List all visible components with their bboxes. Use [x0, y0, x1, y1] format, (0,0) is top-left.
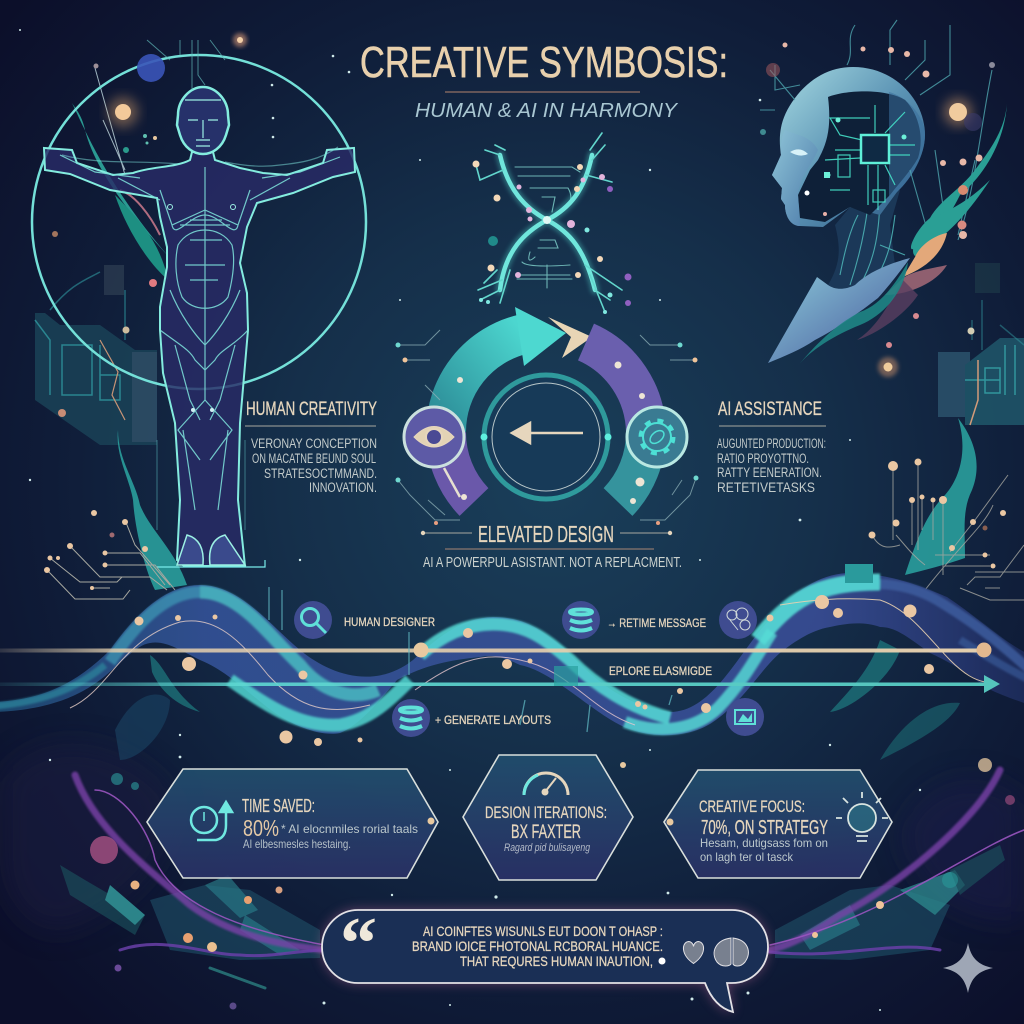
panel: design iterations: Ragard pid bulisayeng — [504, 842, 591, 854]
label: ai assistance: RETETIVETASKS — [717, 480, 815, 495]
face details — [185, 100, 221, 146]
icon: light bulb — [836, 792, 888, 841]
panel: time saved: TIME SAVED: — [242, 796, 315, 816]
chip — [861, 135, 889, 163]
circuit stems — [269, 587, 672, 732]
panel: design iterations — [463, 755, 633, 880]
circuit branches around diagram — [398, 330, 696, 520]
title: CREATIVE SYMBOSIS: — [360, 38, 728, 87]
callout: quote bubble: THAT REQURES HUMAN INAUTION, — [460, 954, 653, 969]
AI head profile — [768, 67, 925, 363]
step: explore: EPLORE ELASMIGDE — [609, 664, 712, 678]
thin wave lines — [70, 599, 985, 725]
panel: design iterations: DESION ITERATIONS: — [485, 803, 607, 822]
shoulders — [768, 258, 910, 363]
panel: time saved: * AI elocnmiles rorial taals — [281, 822, 418, 836]
teal arrow head — [515, 307, 566, 366]
icon: clock with arrow — [191, 802, 232, 840]
step: retime message: → RETIME MESSAGE — [607, 616, 706, 630]
hourglass lines — [515, 167, 580, 288]
knot nodes — [472, 160, 603, 278]
planet and orbs — [108, 33, 247, 287]
bottom purple swirls left — [75, 775, 325, 988]
eye — [790, 149, 808, 156]
circular diagram — [404, 307, 687, 504]
label: ai assistance — [717, 399, 826, 495]
panel: creative focus: 70%, ON STRATEGY — [701, 817, 828, 839]
step: human designer — [294, 601, 435, 639]
background blobs — [0, 743, 1024, 932]
bottom left tech fan — [60, 865, 320, 960]
sparkle gem — [943, 943, 993, 993]
circuit nodes left — [44, 510, 148, 590]
bottom purple swirls right — [770, 770, 1024, 954]
base — [157, 560, 265, 567]
panel: creative focus — [664, 770, 892, 878]
glow — [500, 155, 595, 290]
central knot illustration — [472, 133, 632, 314]
label: ai assistance: RATTY EENERATION. — [717, 465, 822, 480]
body silhouette — [44, 148, 355, 566]
gear icon — [627, 407, 687, 467]
quote mark: “ — [340, 903, 377, 985]
flowing wave band — [0, 573, 1024, 735]
eye icon — [404, 407, 464, 467]
right flame — [905, 418, 977, 575]
bottom right tech fan — [775, 845, 1005, 960]
left arrow — [512, 423, 583, 443]
label: human creativity: INNOVATION. — [309, 480, 377, 495]
callout: quote bubble: AI COINFTES WISUNLS EUT DOON T OHASP : — [423, 924, 663, 939]
elevated design heading — [421, 521, 672, 549]
callout: quote bubble — [322, 903, 768, 1012]
human figure — [44, 87, 355, 567]
feet — [177, 535, 245, 565]
right grid chip — [845, 564, 873, 583]
dark interior — [798, 91, 921, 222]
step: human designer: HUMAN DESIGNER — [344, 615, 435, 629]
circuits right of wave — [872, 461, 1024, 600]
wave beads — [134, 595, 934, 746]
step: generate layouts — [392, 699, 551, 737]
decorative title divider — [445, 91, 640, 93]
panel: design iterations: BX FAXTER — [511, 822, 581, 843]
circuit nodes right — [868, 458, 1006, 568]
icon: heart — [683, 942, 704, 964]
label: ai assistance: RATIO PROYOTTNO. — [717, 451, 809, 466]
label: human creativity: HUMAN CREATIVITY — [246, 399, 377, 420]
icon: gauge — [524, 773, 568, 796]
vitruvian plant behind figure — [72, 64, 170, 280]
glass dome shell — [772, 67, 925, 227]
timeline lines — [0, 642, 1000, 693]
callout: quote bubble: BRAND IOICE FHOTONAL RCBORAL HUANCE. — [412, 939, 663, 954]
label: human creativity — [245, 399, 377, 495]
teal arc — [446, 334, 524, 432]
purple lower arc — [446, 432, 474, 502]
nodes — [168, 204, 236, 412]
anatomical lines — [60, 147, 340, 510]
cream chevron — [548, 317, 592, 358]
teal lower arc — [618, 432, 646, 502]
tagline: AI A POWERPUL ASISTANT. NOT A REPLACMENT. — [423, 555, 682, 571]
AI ribbons and leaves — [797, 103, 1007, 367]
step: generate layouts: + GENERATE LAYOUTS — [435, 713, 551, 727]
panel: time saved — [147, 769, 438, 878]
step icon: network — [719, 601, 757, 639]
head — [177, 87, 229, 154]
label: ai assistance: AUGUNTED PRODUCTION: — [717, 436, 826, 451]
neck lines — [840, 190, 905, 285]
icon: brain — [714, 938, 748, 966]
X branches — [500, 155, 595, 290]
arc beads — [457, 362, 645, 504]
step icon: image — [726, 698, 764, 736]
circuits left of wave — [47, 520, 175, 599]
panel: creative focus: on lagh ter ol tasck — [700, 850, 794, 864]
panel: time saved: AI elbesmesles hestaing. — [243, 837, 351, 851]
panel: time saved: 80% — [243, 815, 279, 841]
label: human creativity: VERONAY CONCEPTION — [251, 436, 377, 451]
label: human creativity: STRATESOCTMMAND. — [264, 466, 377, 481]
vitruvian circle — [32, 55, 366, 389]
sparks around AI head — [760, 42, 995, 377]
branch nodes — [396, 342, 698, 525]
face — [772, 130, 818, 226]
translucent rear shell — [889, 92, 925, 198]
elevated design heading: ELEVATED DESIGN — [478, 521, 614, 547]
central ring — [484, 375, 608, 499]
label: ai assistance: AI ASSISTANCE — [718, 399, 822, 420]
purple upper arc — [586, 342, 646, 432]
subtitle: HUMAN & AI IN HARMONY — [415, 100, 679, 122]
grid chip on wave — [554, 666, 578, 686]
wave ribbon highlights — [0, 582, 1024, 729]
circuits above AI head — [760, 20, 992, 240]
side machinery: left — [35, 231, 157, 445]
label: human creativity: ON MACATNE BEUND SOUL — [252, 451, 376, 466]
panel: creative focus: Hesam, dutigsass fom on — [700, 836, 828, 850]
side machinery: right — [938, 263, 1024, 425]
circuit traces — [825, 105, 915, 210]
left flame — [118, 430, 187, 590]
neck — [828, 190, 900, 305]
bottom orbs — [90, 758, 1015, 1010]
step: retime message — [562, 601, 706, 639]
panel: creative focus: CREATIVE FOCUS: — [699, 797, 805, 816]
teal blobs below timeline — [115, 640, 960, 760]
magnifier handle — [444, 468, 460, 497]
circuit lines above figure — [147, 40, 225, 90]
